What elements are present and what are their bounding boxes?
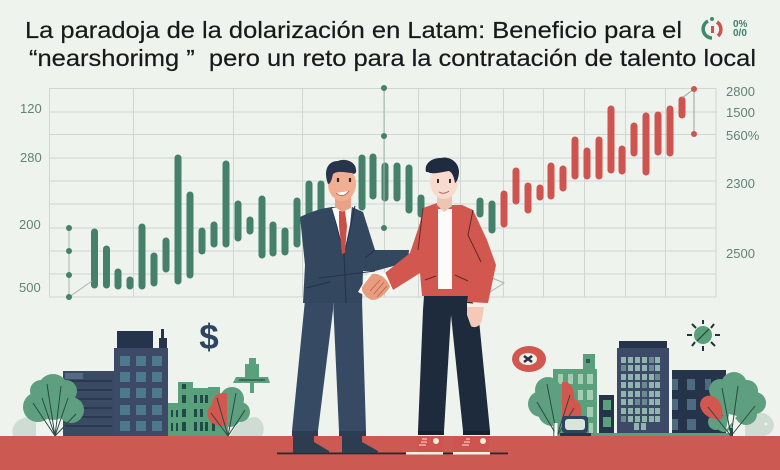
title: “nearshorimg ” pero un reto para la contratación de talento local [29, 45, 756, 71]
tie [339, 211, 347, 254]
low office building [63, 371, 114, 436]
shoes [293, 436, 378, 453]
green building right [553, 354, 597, 436]
right axis labels: 2500 [726, 246, 755, 261]
right axis labels [726, 84, 760, 261]
cuffs [418, 431, 490, 435]
chart markers left [66, 225, 92, 300]
icon: small plant [233, 358, 270, 393]
smile [336, 191, 349, 196]
icon: donut and percent [703, 17, 748, 39]
icon: dollar sign: $ [199, 318, 219, 357]
tree mid right [528, 377, 581, 436]
right axis labels: 2800 [726, 84, 755, 99]
small outline triangle [490, 277, 504, 292]
neck [437, 192, 452, 212]
laptop [560, 416, 591, 436]
neck [335, 195, 351, 212]
trousers [292, 300, 366, 431]
speech bubble icon [512, 346, 546, 372]
shirt [332, 206, 352, 253]
background bush left [12, 417, 36, 436]
chart markers right [682, 86, 697, 137]
shirt front [438, 209, 452, 289]
smile [439, 191, 449, 193]
left axis labels: 200 [19, 217, 41, 232]
sneakers [406, 436, 490, 454]
chart grid [49, 88, 716, 297]
building base strip [590, 433, 730, 436]
right axis labels: 1500 [726, 105, 755, 120]
eyes [438, 179, 450, 183]
left skyline [12, 329, 264, 436]
jacket [300, 207, 409, 303]
tree with red leaves left [207, 387, 264, 436]
left axis labels: 500 [19, 280, 41, 295]
green bars series [94, 157, 492, 286]
trousers [418, 296, 490, 431]
face [328, 167, 356, 201]
green building [168, 382, 228, 436]
icon: donut and percent: 0/0 [733, 28, 747, 39]
title [25, 17, 756, 71]
left axis labels: 120 [20, 101, 42, 116]
chart markers center [381, 85, 387, 231]
hair [326, 160, 356, 184]
right skyline [512, 320, 774, 436]
person: man in suit [292, 160, 409, 453]
tree right [700, 372, 774, 436]
ground [0, 436, 780, 470]
jacket seams [306, 206, 375, 303]
tall glass building [617, 341, 669, 433]
eyes [338, 178, 350, 182]
ground shadow under figures [277, 452, 508, 454]
jacket [385, 203, 496, 303]
jacket seams [418, 208, 481, 281]
tall office building [114, 329, 168, 436]
face [430, 165, 458, 199]
handshake [358, 272, 393, 300]
hair [426, 158, 459, 183]
red bars series [504, 100, 682, 224]
trouser cuffs [292, 431, 366, 436]
tree left [23, 374, 84, 436]
right axis labels: 560% [726, 128, 760, 143]
small dark building [599, 395, 614, 433]
left axis labels [19, 101, 42, 295]
icon: donut and percent: 0% [733, 19, 748, 30]
right axis labels: 2300 [726, 176, 755, 191]
title: La paradoja de la dolarización en Latam: Beneficio para el [25, 17, 682, 43]
left axis labels: 280 [20, 150, 42, 165]
person: man in red jacket [385, 158, 496, 455]
cuff [467, 303, 490, 308]
dark building right [672, 370, 726, 433]
icon: sun [687, 320, 720, 351]
hand [467, 307, 484, 327]
shirt [434, 204, 454, 290]
